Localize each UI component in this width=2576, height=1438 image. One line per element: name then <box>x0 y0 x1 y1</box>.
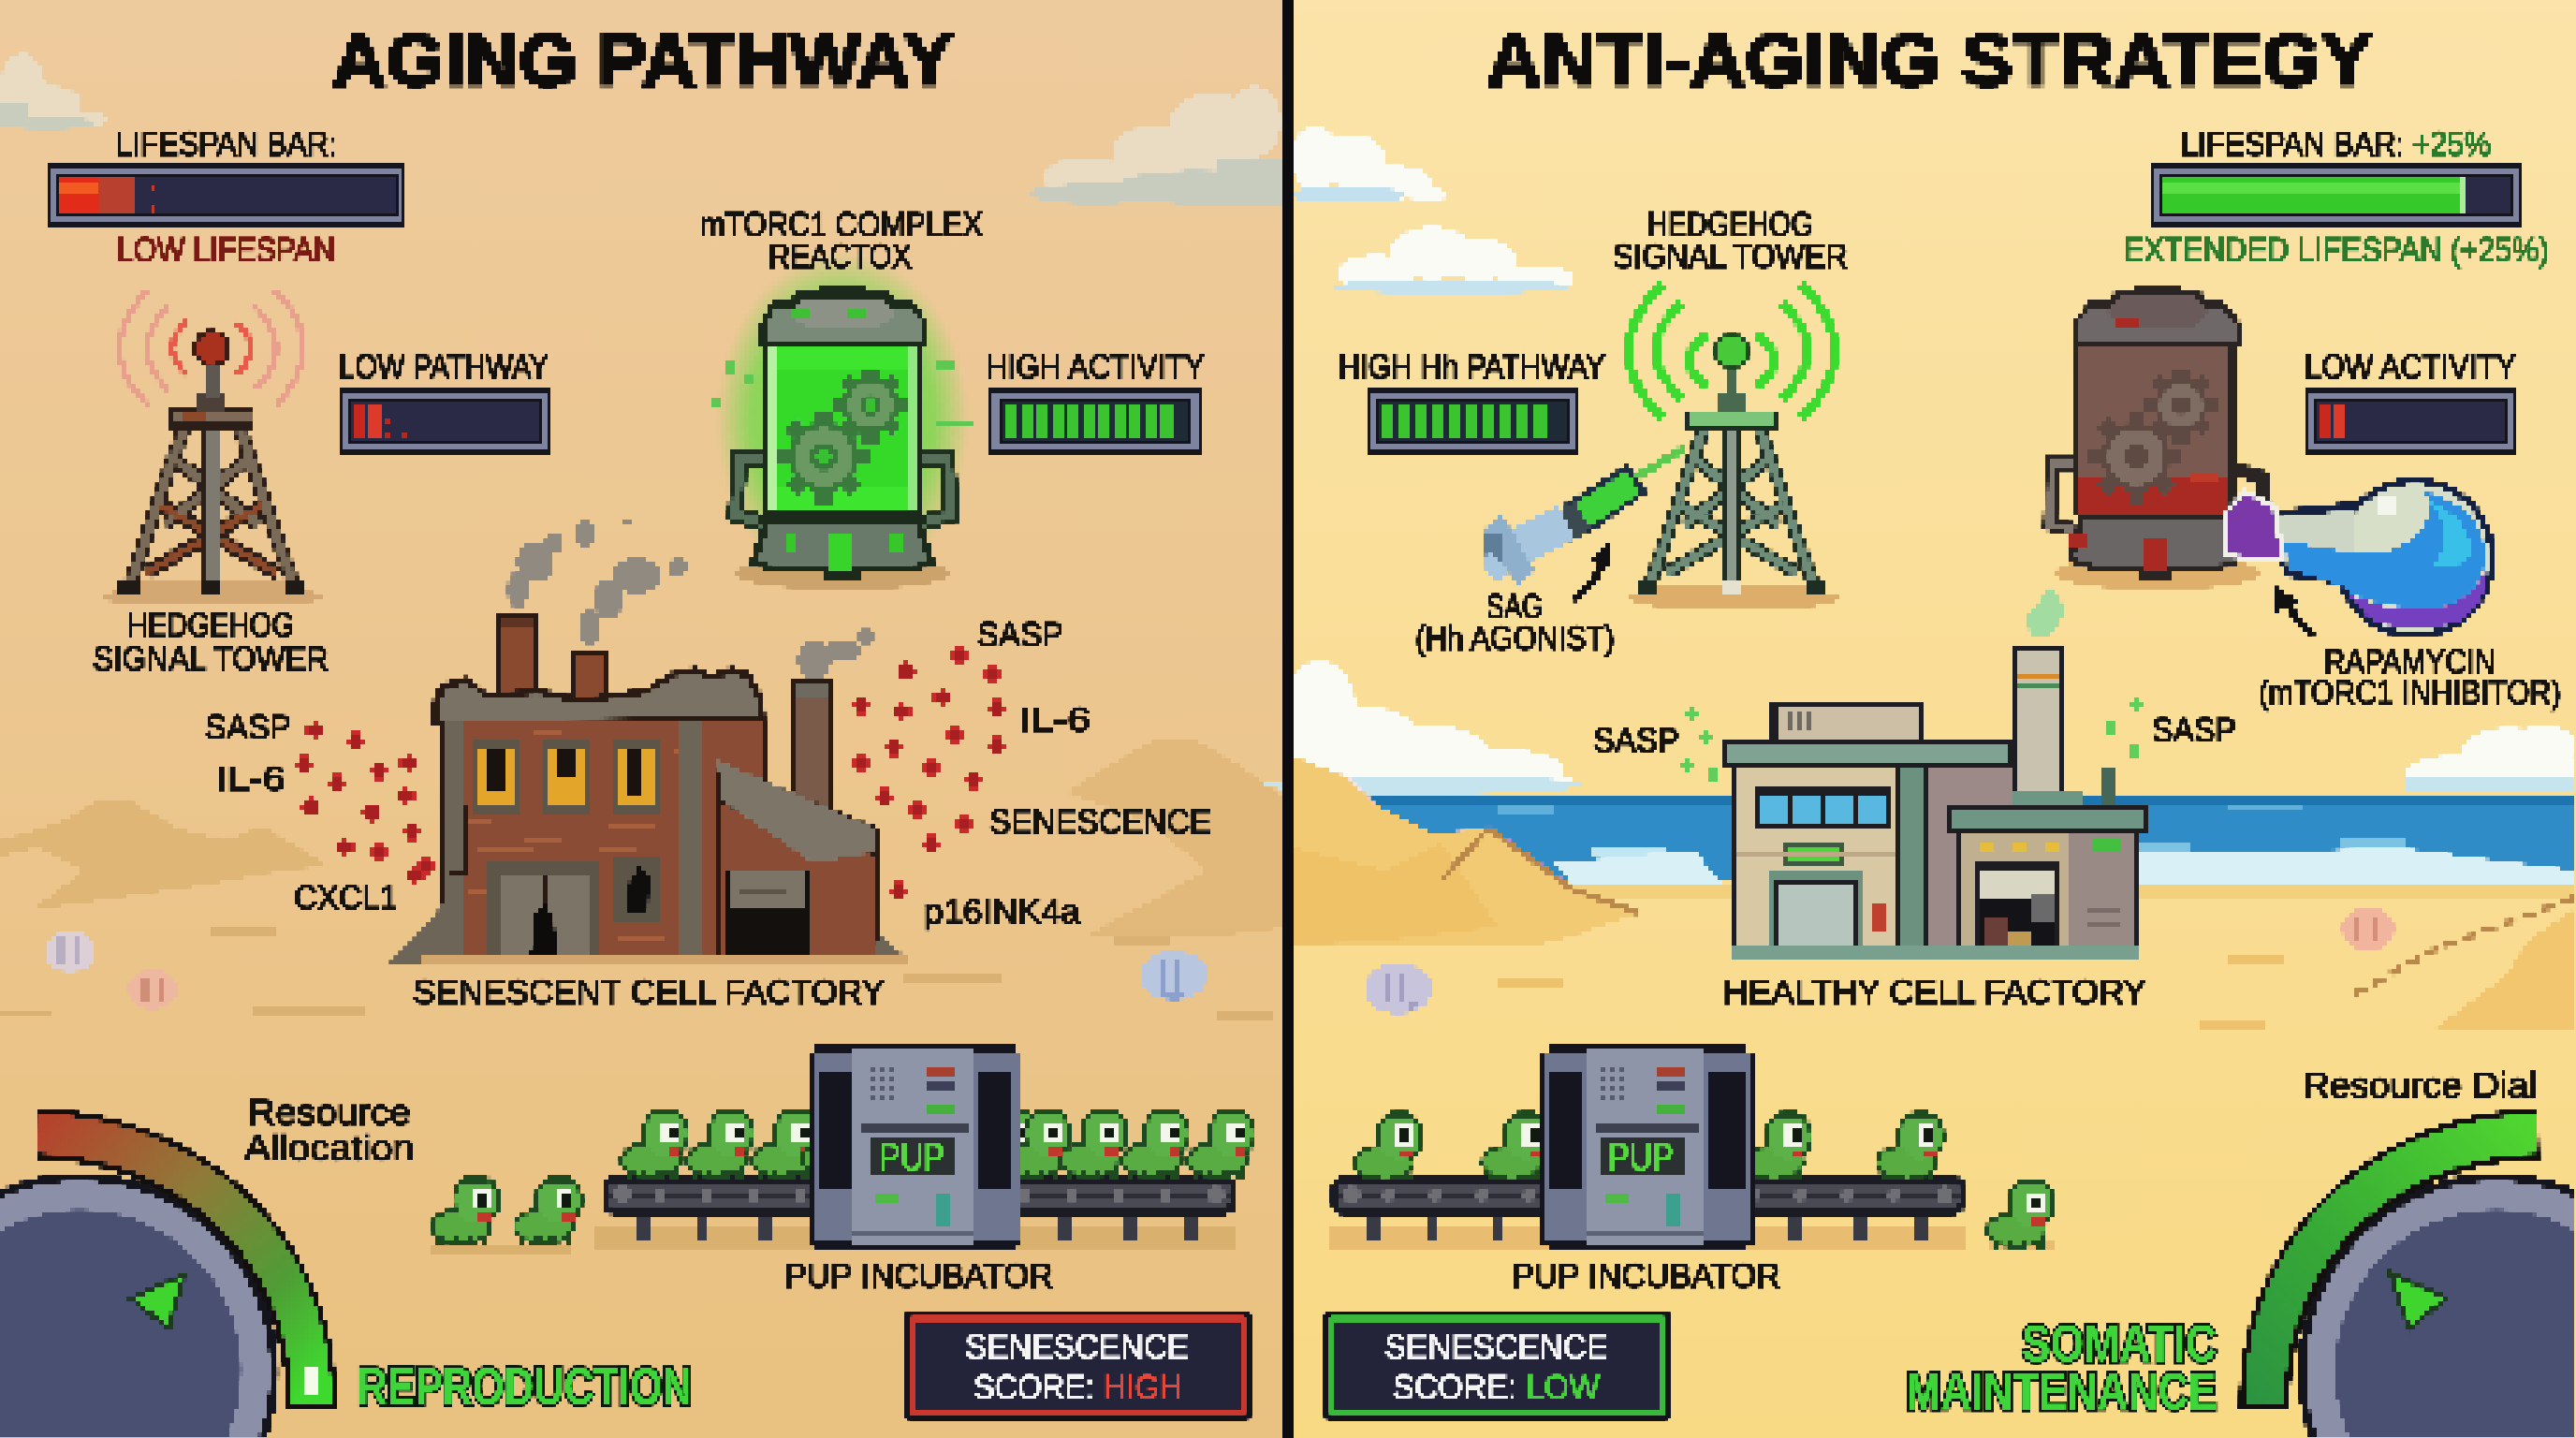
bar: high Hh pathway <box>1368 388 1578 455</box>
small gear <box>2144 368 2218 443</box>
arrow: towards flask <box>2273 586 2314 635</box>
labels: senescent factory secretions: SENESCENCE <box>989 802 1211 841</box>
PUP screen label right: PUP <box>1608 1135 1674 1179</box>
panel: senescence score high: SENESCENCE <box>965 1328 1189 1366</box>
labels: healthy factory SASP: SASP <box>2152 711 2236 749</box>
icon: overactive mTORC1 reactor <box>711 253 975 590</box>
icon: healthy cell factory <box>1722 644 2147 961</box>
label: mTORC1 reactor: REACTOX <box>768 237 912 275</box>
small gear <box>833 368 908 443</box>
labels: senescent factory secretions <box>205 615 1211 931</box>
background: left desert panel <box>0 0 1284 1438</box>
icon: senescent cell factory <box>390 612 908 964</box>
label: pup incubator right: PUP INCUBATOR <box>1512 1256 1780 1295</box>
label: senescent cell factory: SENESCENT CELL FACTORY <box>413 973 885 1011</box>
label: SAG Hh agonist <box>1415 587 1615 657</box>
right panel sea <box>1294 795 2576 899</box>
panel: senescence score low <box>1323 1311 1672 1420</box>
left resource dial <box>0 1134 318 1438</box>
label: hedgehog tower right: HEDGEHOG <box>1647 205 1813 243</box>
icon: Hh agonist syringe <box>1481 448 1685 585</box>
label: resource allocation: Resource <box>248 1093 411 1133</box>
label: somatic maintenance: SOMATIC <box>2022 1313 2217 1372</box>
label: hedgehog tower right <box>1613 205 1848 275</box>
right pup incubator <box>1540 1042 1753 1249</box>
bar: low pathway <box>339 388 550 455</box>
background: right beach panel <box>1290 0 2576 1438</box>
label: resource dial: Resource Dial <box>2303 1066 2537 1106</box>
labels: senescent factory secretions: IL-6 <box>215 759 285 798</box>
label: somatic maintenance: MAINTENANCE <box>1906 1361 2217 1420</box>
SASP particles: senescent factory <box>296 647 1006 901</box>
burned window <box>611 740 662 813</box>
labels: healthy factory SASP <box>1593 711 2236 759</box>
label: reproduction: REPRODUCTION <box>358 1357 692 1416</box>
PUP screen label left: PUP <box>879 1135 944 1179</box>
panel: senescence score low: SENESCENCE <box>1384 1328 1608 1366</box>
label: resource allocation: Allocation <box>244 1129 415 1168</box>
lifespan bar: extended <box>2150 164 2522 227</box>
labels: senescent factory secretions: SASP <box>977 615 1063 653</box>
icon: inhibited mTORC1 reactor <box>2050 286 2265 590</box>
label: resource allocation <box>244 1093 415 1168</box>
label: hedgehog tower right: SIGNAL TOWER <box>1613 237 1848 275</box>
title: anti-aging strategy: ANTI-AGING STRATEGY <box>1486 19 2372 101</box>
labels: senescent factory secretions: CXCL1 <box>294 878 398 917</box>
label: pup incubator left: PUP INCUBATOR <box>784 1256 1053 1295</box>
large gear <box>2089 410 2183 504</box>
label: rapamycin mTORC1 inhibitor <box>2259 642 2561 712</box>
label: somatic maintenance <box>1906 1313 2217 1420</box>
label: hedgehog tower left: SIGNAL TOWER <box>93 639 329 678</box>
labels: healthy factory SASP: SASP <box>1593 721 1679 759</box>
label: hedgehog tower left: HEDGEHOG <box>127 606 294 644</box>
label: high activity: HIGH ACTIVITY <box>986 347 1205 386</box>
labels: senescent factory secretions: p16INK4a <box>924 892 1081 931</box>
label: low lifespan: LOW LIFESPAN <box>117 230 335 269</box>
icon: healthy hedgehog signal tower <box>1623 285 1845 607</box>
right conveyor belt with pups <box>1331 1110 2056 1249</box>
label: healthy cell factory: HEALTHY CELL FACTORY <box>1723 973 2146 1011</box>
burned window <box>471 740 521 813</box>
labels: senescent factory secretions: IL-6 <box>1018 700 1090 739</box>
arrow: towards syringe <box>1573 541 1612 599</box>
left conveyor belt with pups <box>431 1108 1256 1245</box>
green vapor and particles: healthy factory <box>1682 588 2142 782</box>
label: lifespan bar left: LIFESPAN BAR: <box>115 125 337 163</box>
smoke from senescent factory <box>507 518 873 679</box>
label: mTORC1 reactor <box>700 205 983 275</box>
icon: rapamycin flask <box>2224 477 2496 638</box>
panel: senescence score low: SCORE: LOW <box>1393 1368 1600 1406</box>
label: rapamycin mTORC1 inhibitor: RAPAMYCIN <box>2324 642 2496 681</box>
title: aging pathway: AGING PATHWAY <box>332 19 953 101</box>
left panel clouds <box>0 53 1282 204</box>
broken door <box>489 861 599 961</box>
panel: senescence score high <box>903 1311 1252 1420</box>
bar: high activity <box>989 388 1201 455</box>
label: mTORC1 reactor: mTORC1 COMPLEX <box>700 205 983 243</box>
right resource dial <box>2264 1134 2576 1438</box>
label: low pathway: LOW PATHWAY <box>339 347 549 386</box>
label: hedgehog tower left <box>93 606 329 678</box>
panel: senescence score high: SCORE: HIGH <box>973 1368 1182 1406</box>
right panel clouds <box>1264 125 2576 794</box>
bar: low activity <box>2305 388 2516 455</box>
belt shadows <box>431 1228 1237 1253</box>
right panel shells <box>1365 907 2394 1014</box>
center divider <box>1282 0 1294 1438</box>
label: high Hh pathway: HIGH Hh PATHWAY <box>1339 347 1605 386</box>
label: SAG Hh agonist: (Hh AGONIST) <box>1415 619 1615 657</box>
right panel dunes <box>1294 756 2576 1030</box>
label: SAG Hh agonist: SAG <box>1486 587 1543 625</box>
left panel shells <box>45 931 1208 1009</box>
icon: rusty hedgehog signal tower <box>98 290 327 605</box>
label: lifespan bar right: LIFESPAN BAR: +25% <box>2181 125 2491 163</box>
label: low activity: LOW ACTIVITY <box>2305 347 2516 386</box>
left panel dunes <box>0 738 1288 1020</box>
left pup incubator <box>809 1042 1022 1249</box>
labels: senescent factory secretions: SASP <box>205 708 291 746</box>
lifespan bar: low <box>48 164 405 227</box>
large gear <box>777 410 871 504</box>
burned window <box>541 740 592 813</box>
